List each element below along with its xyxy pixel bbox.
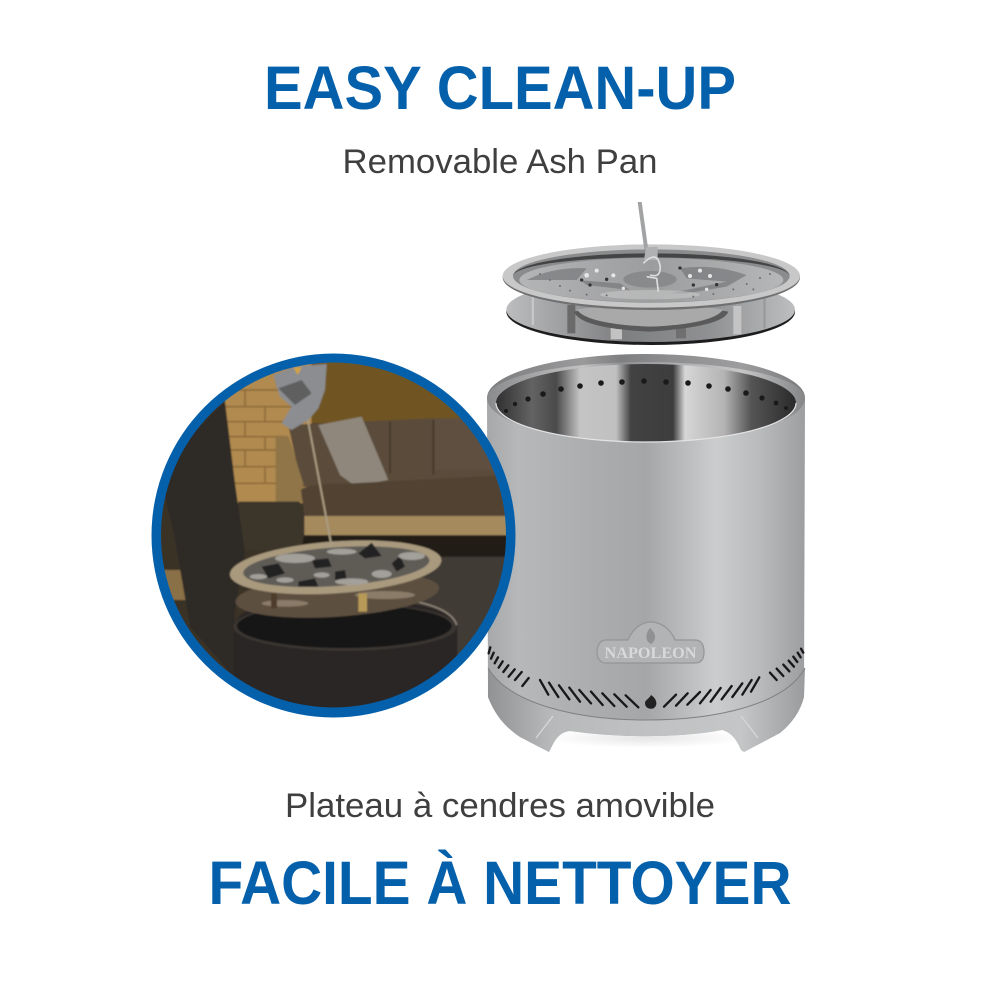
brick wall <box>225 363 312 503</box>
flame vent holes <box>504 378 788 413</box>
sofa seat <box>301 475 508 516</box>
dark floor <box>302 535 508 559</box>
lower disc <box>506 277 795 345</box>
Napoleon logo <box>597 622 704 663</box>
title: Easy Clean-Up: EASY CLEAN-UP <box>264 54 736 122</box>
can outer wall <box>487 398 805 752</box>
blue ring <box>152 354 516 718</box>
handle rod <box>638 202 660 292</box>
gloved hand <box>273 364 327 430</box>
side seat <box>238 502 304 550</box>
foliage <box>312 362 461 424</box>
title: Facile à nettoyer: FACILE À NETTOYER <box>208 849 792 917</box>
sofa back <box>288 418 508 487</box>
supports <box>358 593 367 612</box>
floor shadow <box>546 728 746 748</box>
wicker base <box>304 516 508 535</box>
upper ash pan <box>228 539 442 596</box>
wicker side <box>276 436 303 503</box>
photo scene <box>161 362 506 708</box>
pillow <box>318 417 388 486</box>
ash and coals <box>262 543 405 587</box>
subtitle: Removable Ash Pan: Removable Ash Pan <box>342 143 658 181</box>
subtitle: Plateau à cendres amovible: Plateau à cendres amovible <box>285 787 715 825</box>
person leg <box>165 402 245 677</box>
interior <box>496 364 796 442</box>
circular photo inset <box>150 350 520 720</box>
fire pit <box>233 603 457 717</box>
upper pan <box>503 244 800 310</box>
rim <box>487 354 805 442</box>
base band <box>488 668 805 752</box>
product: removable ash pan <box>503 202 800 345</box>
bottom vent slits <box>489 647 803 707</box>
bottom flame icon <box>645 695 656 709</box>
Napoleon logo: NAPOLEON <box>604 645 696 662</box>
poker rod <box>306 420 333 542</box>
product: fire pit body <box>487 354 805 752</box>
lower ash disc <box>235 577 440 619</box>
